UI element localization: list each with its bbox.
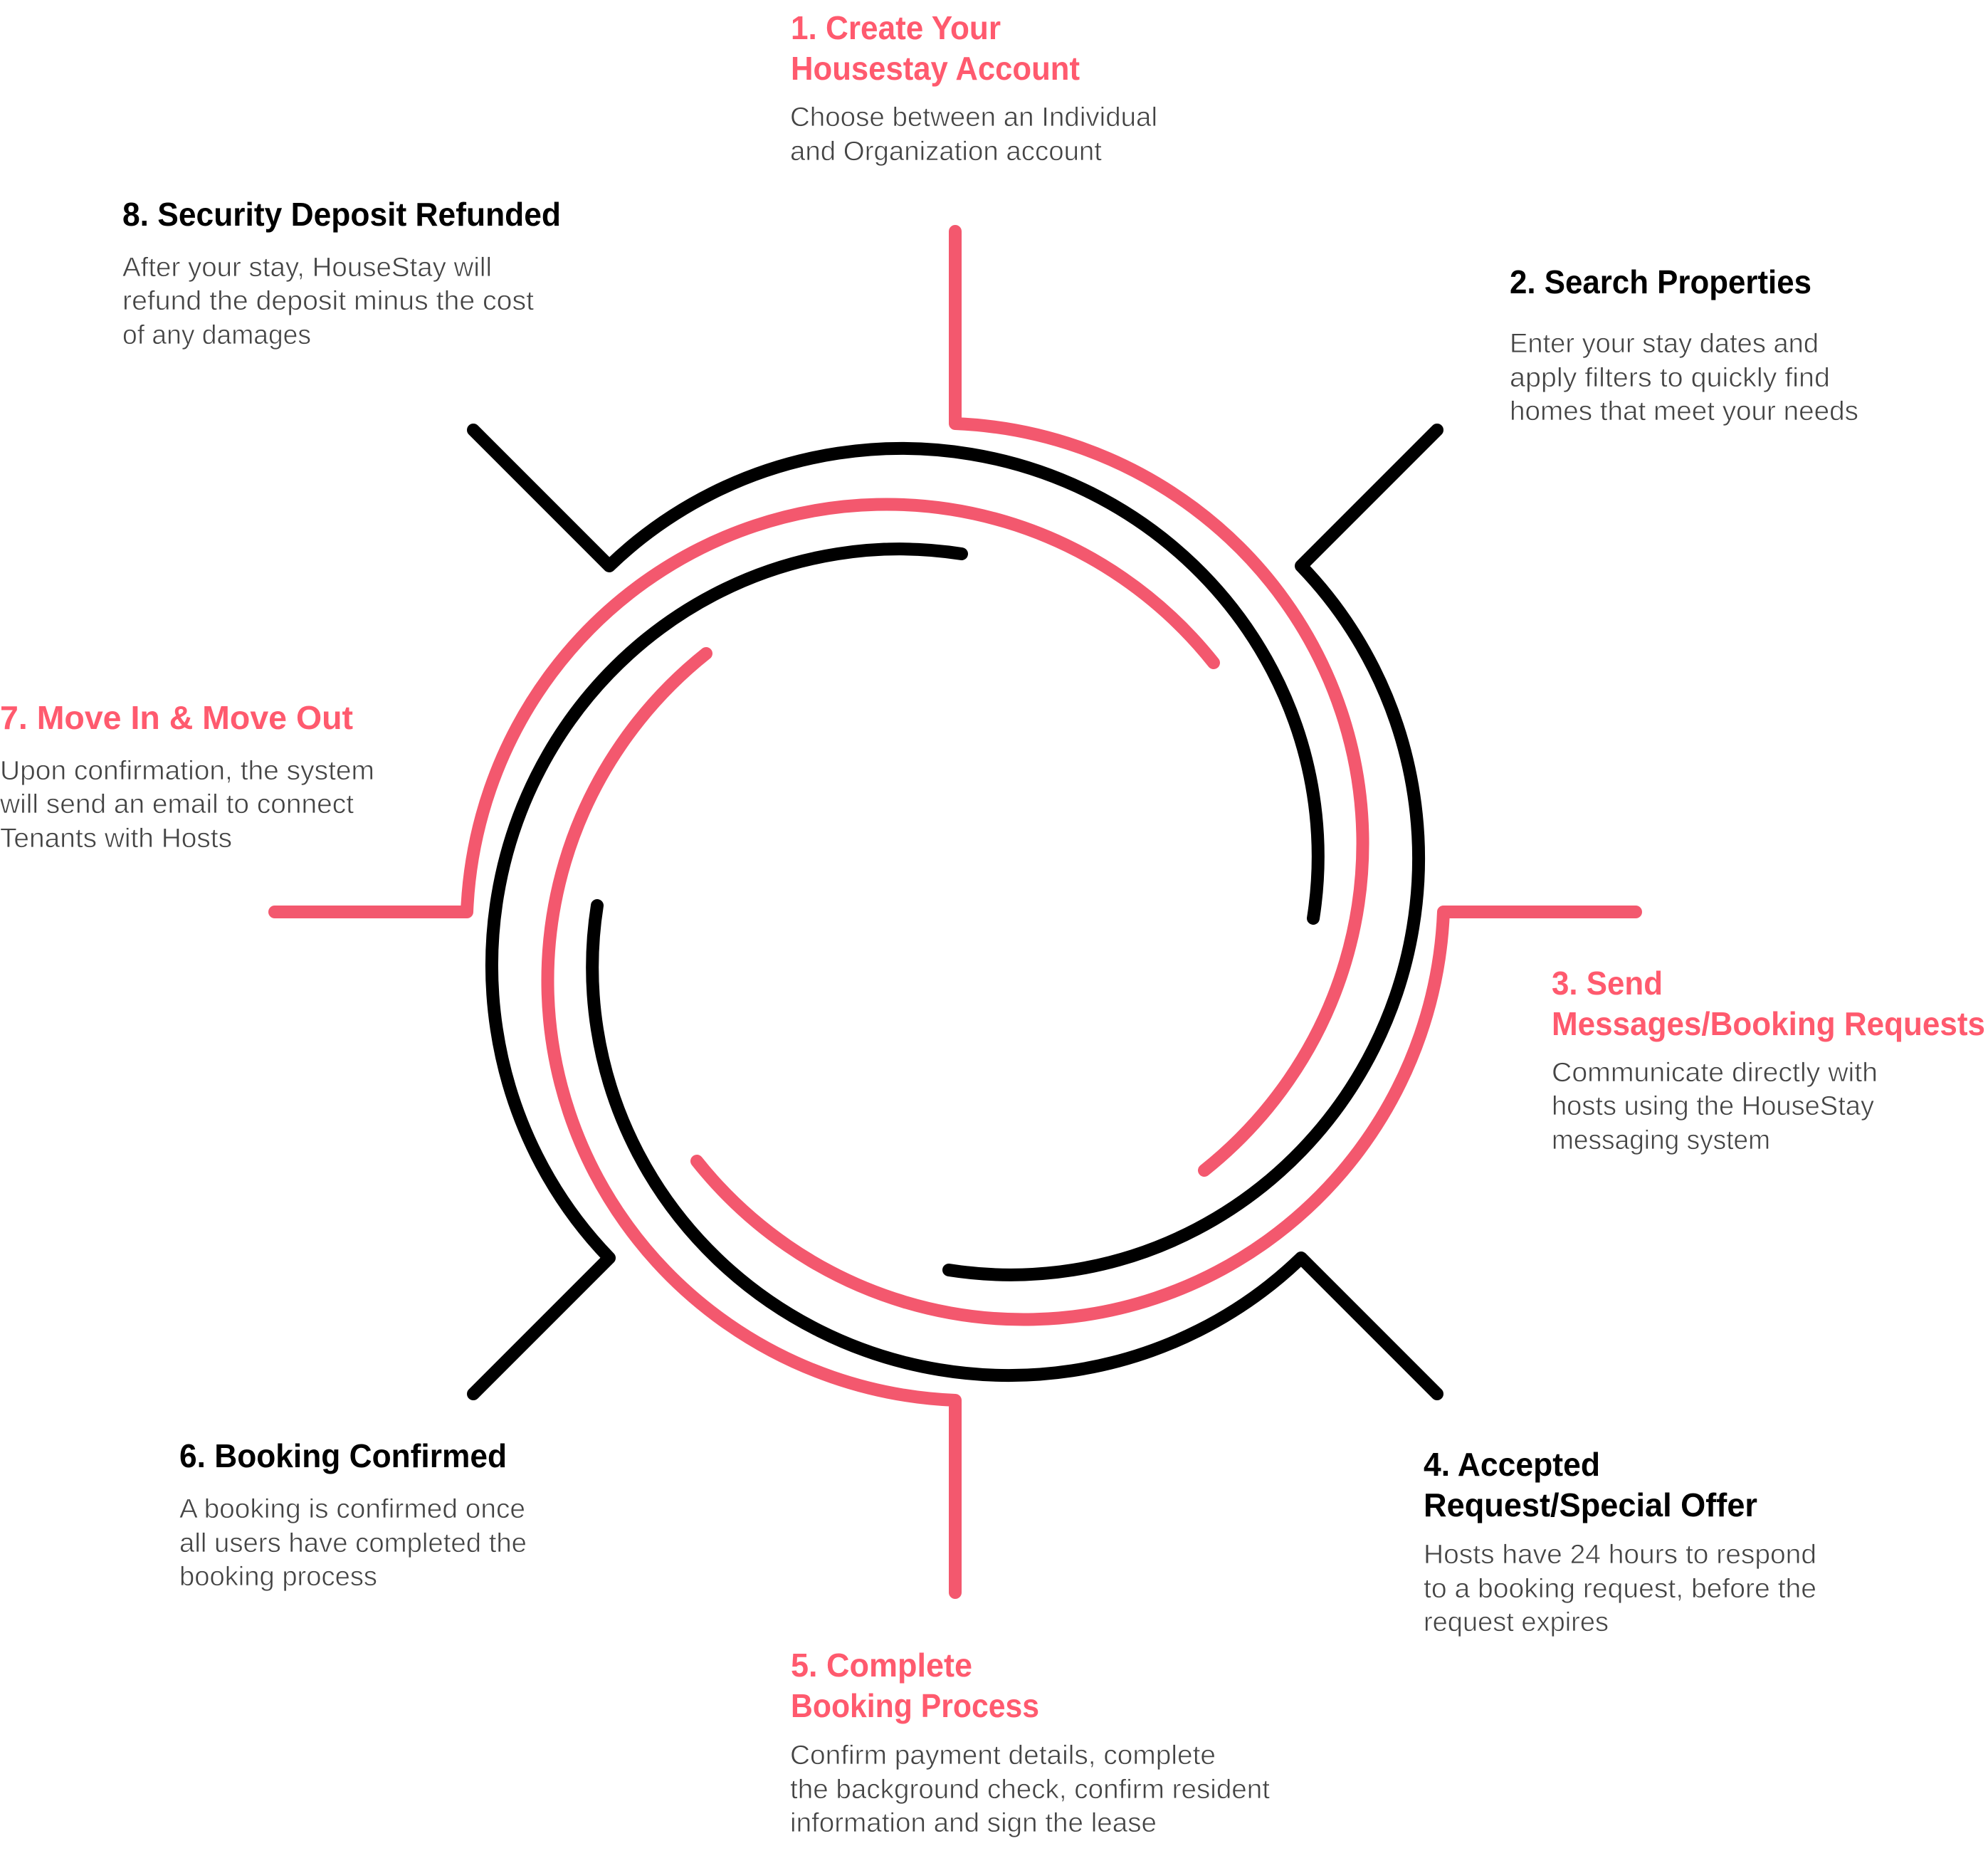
step 5 description: Confirm payment details, complete bbox=[790, 1741, 1216, 1770]
step 2 description bbox=[1510, 329, 1858, 426]
step 1 description: and Organization account bbox=[790, 137, 1102, 167]
spiral arm 3: pink bbox=[697, 912, 1636, 1320]
step 5 heading bbox=[791, 1647, 1039, 1724]
step 8 description: refund the deposit minus the cost bbox=[122, 286, 534, 316]
step 7 description: Upon confirmation, the system bbox=[0, 756, 374, 786]
step 4 heading: 4. Accepted bbox=[1424, 1446, 1600, 1483]
step 1 text bbox=[790, 9, 1157, 167]
step 2 text bbox=[1510, 263, 1858, 426]
step 3 text bbox=[1552, 965, 1985, 1155]
spiral arm 7: pink bbox=[275, 504, 1214, 912]
spiral arm 4: black bbox=[592, 906, 1437, 1394]
step 3 description: hosts using the HouseStay bbox=[1552, 1091, 1874, 1121]
step 1 description bbox=[790, 103, 1157, 167]
step 8 description: of any damages bbox=[122, 320, 311, 350]
step 8 description: After your stay, HouseStay will bbox=[122, 253, 492, 283]
step 3 description bbox=[1552, 1058, 1878, 1155]
step 7 description: will send an email to connect bbox=[0, 789, 354, 819]
step 3 heading: 3. Send bbox=[1552, 965, 1663, 1002]
step 4 description: Hosts have 24 hours to respond bbox=[1424, 1540, 1816, 1570]
step 3 description: messaging system bbox=[1552, 1125, 1770, 1155]
step 4 heading: Request/Special Offer bbox=[1424, 1486, 1757, 1523]
step 6 heading: 6. Booking Confirmed bbox=[179, 1437, 507, 1474]
step 5 description bbox=[790, 1741, 1270, 1838]
step 5 text bbox=[790, 1647, 1270, 1838]
step 7 text bbox=[0, 699, 374, 854]
step 8 description bbox=[122, 253, 534, 350]
step 2 heading: 2. Search Properties bbox=[1510, 263, 1811, 300]
spiral arm 6: black bbox=[473, 549, 962, 1394]
step 4 heading bbox=[1424, 1446, 1757, 1523]
step 5 heading: 5. Complete bbox=[791, 1647, 972, 1684]
step 6 description: A booking is confirmed once bbox=[179, 1494, 525, 1524]
step 1 heading bbox=[791, 9, 1080, 87]
step 6 description: all users have completed the bbox=[179, 1528, 527, 1558]
step 5 heading: Booking Process bbox=[791, 1687, 1039, 1724]
step 7 description: Tenants with Hosts bbox=[0, 824, 232, 854]
step 6 text bbox=[179, 1437, 527, 1592]
step 2 description: homes that meet your needs bbox=[1510, 397, 1858, 426]
step 2 description: apply filters to quickly find bbox=[1510, 363, 1830, 393]
step 1 heading: Housestay Account bbox=[791, 50, 1080, 87]
step 8 text bbox=[122, 196, 561, 350]
step 3 heading bbox=[1552, 965, 1985, 1042]
step 7 description bbox=[0, 756, 374, 854]
step 4 description: to a booking request, before the bbox=[1424, 1574, 1816, 1604]
step 1 heading: 1. Create Your bbox=[791, 9, 1001, 46]
step 8 heading: 8. Security Deposit Refunded bbox=[122, 196, 561, 233]
step 5 description: information and sign the lease bbox=[790, 1808, 1157, 1838]
step 4 description: request expires bbox=[1424, 1607, 1609, 1637]
spiral arm 5: pink bbox=[547, 654, 955, 1592]
step 2 description: Enter your stay dates and bbox=[1510, 329, 1819, 359]
step 4 description bbox=[1424, 1540, 1816, 1637]
step 6 description: booking process bbox=[179, 1562, 377, 1592]
step 4 text bbox=[1424, 1446, 1816, 1637]
spiral arm 1: pink bbox=[955, 231, 1363, 1170]
step 3 description: Communicate directly with bbox=[1552, 1058, 1878, 1088]
step 6 description bbox=[179, 1494, 527, 1592]
step 5 description: the background check, confirm resident bbox=[790, 1775, 1270, 1805]
step 1 description: Choose between an Individual bbox=[790, 103, 1157, 132]
spiral arm 8: black bbox=[473, 430, 1318, 918]
step 7 heading: 7. Move In & Move Out bbox=[0, 699, 353, 736]
spiral arm 2: black bbox=[949, 430, 1437, 1275]
